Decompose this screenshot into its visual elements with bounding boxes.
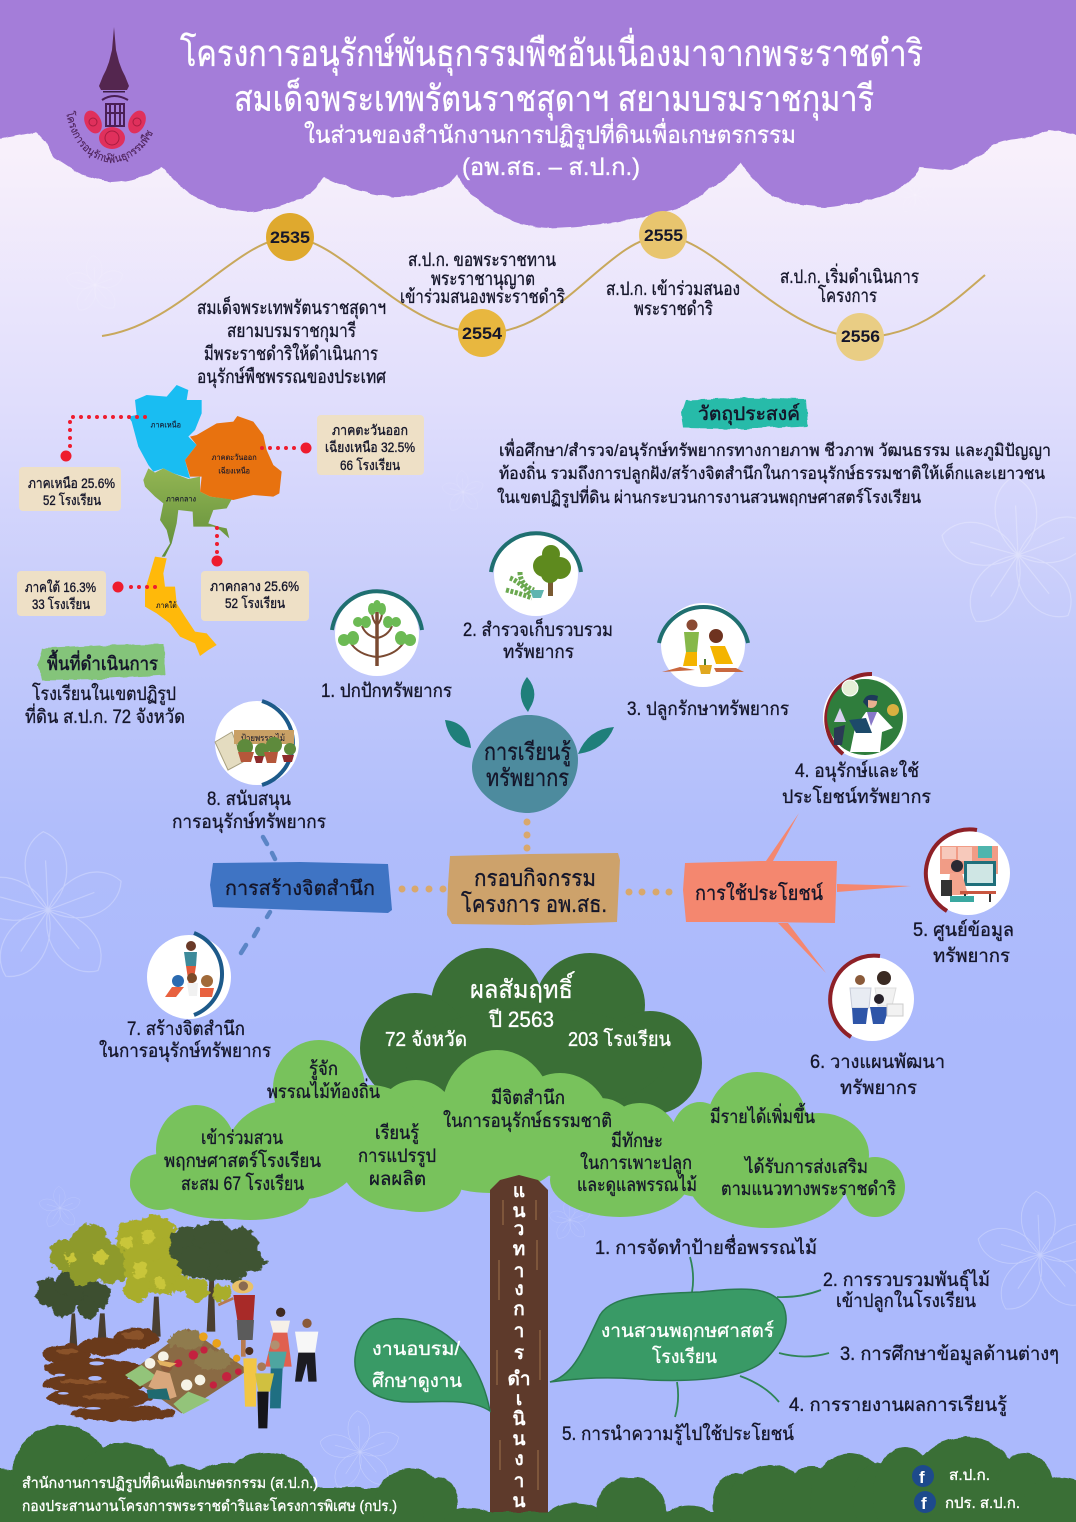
training leaf [355,1319,490,1411]
year 2535 [266,213,314,261]
icon: children planting [662,620,744,674]
activity 4: ประโยชน์ทรัพยากร [782,785,931,808]
activity 6 [810,956,945,1099]
training leaf: ศึกษาดูงาน [372,1371,462,1392]
year 2554 [458,309,506,357]
region names: ภาคตะวันออก [212,453,257,462]
activity 2 [463,532,613,663]
region names: เฉียงเหนือ [218,466,250,475]
timeline [102,211,985,389]
benefit text: ในการเพาะปลูก [580,1152,692,1174]
activity 7 [99,933,271,1063]
woman in yellow [243,1347,257,1407]
benefit text: เข้าร่วมสวน [201,1128,283,1149]
awareness box: การสร้างจิตสำนึก [225,878,375,900]
achievement tree canopy dark [360,948,702,1115]
benefit text: มีจิตสำนึก [491,1087,565,1109]
year 2555: 2555 [644,226,683,245]
botanical garden leaf [550,1257,829,1417]
vertical text: ร [514,1343,525,1364]
text 2535: สยามบรมราชกุมารี [227,320,356,343]
vertical text: ก [513,1299,525,1320]
man in red [218,1280,255,1357]
vertical text: า [514,1321,524,1342]
connector dots [398,818,672,896]
activity 6: 6. วางแผนพัฒนา [810,1052,945,1073]
achievement text: 203 โรงเรียน [568,1028,671,1051]
area text: ที่ดิน ส.ป.ก. 72 จังหวัด [25,703,185,728]
vertical text: ว [514,1219,524,1240]
north region [128,385,202,478]
people [218,1280,318,1428]
south callout: ภาคใต้ 16.3% [25,579,96,595]
social labels: ส.ป.ก. [949,1467,990,1484]
garden tasks: 5. การนำความรู้ไปใช้ประโยชน์ [562,1422,794,1445]
title: สมเด็จพระเทพรัตนราชสุดาฯ สยามบรมราชกุมารี [234,76,874,121]
title [180,27,923,181]
garden illustration [36,1216,318,1428]
man in khaki [255,1362,274,1428]
utilization box [683,813,911,973]
icon: facebook 1: f [919,1468,925,1487]
training leaf: งานอบรม/ [372,1339,461,1360]
objectives [497,398,1051,508]
footer text [22,1472,397,1515]
benefit text: และดูแลพรรณไม้ [577,1174,697,1196]
benefit text [164,1059,896,1200]
activity 8: 8. สนับสนุน [207,789,291,811]
year 2554: 2554 [462,324,503,343]
vertical text: น [512,1491,526,1512]
activity 3: 3. ปลูกรักษาทรัพยากร [627,699,789,720]
benefit text: สะสม 67 โรงเรียน [181,1172,304,1195]
activity 4 [782,674,931,808]
social labels: กปร. ส.ป.ก. [945,1495,1020,1512]
garden tasks [562,1234,1059,1445]
vertical text: า [514,1471,524,1492]
garden tasks: 1. การจัดทำป้ายชื่อพรรณไม้ [595,1234,817,1259]
logo: โครงการอนุรักษ์พันธุกรรมพืช [66,110,153,164]
framework box [447,853,620,925]
northeast callout: เฉียงเหนือ 32.5% [325,439,415,455]
achievement text [385,971,671,1051]
text 2556: โครงการ [818,284,877,307]
trees [36,1216,265,1347]
text 2556 [780,263,919,307]
timeline curve [102,235,985,337]
area heading: พื้นที่ดำเนินการ [47,650,158,675]
icon: facebook 1 [912,1465,934,1487]
spire [99,27,129,90]
text 2554: ส.ป.ก. ขอพระราชทาน [408,250,556,271]
region names [151,420,257,610]
vertical text: ง [514,1449,524,1470]
garden tasks: 2. การรวบรวมพันธุ์ไม้ [823,1269,990,1292]
map callout lines [70,417,296,587]
soil [43,1328,177,1421]
text 2535 [197,295,386,389]
text 2554: พระราชานุญาต [431,269,535,291]
trunk [490,1175,548,1516]
activity 2: 2. สำรวจเก็บรวบรวม [463,617,613,641]
monogram [102,96,128,126]
activity 7: 7. สร้างจิตสำนึก [127,1019,245,1040]
achievement text: 72 จังหวัด [385,1029,467,1051]
benefit text: ในการอนุรักษ์ธรรมชาติ [443,1110,612,1133]
learning blob: ทรัพยากร [486,765,569,792]
northeast callout: ภาคตะวันออก [332,422,408,438]
learning blob [445,677,614,813]
benefit text: ได้รับการส่งเสริม [743,1156,868,1178]
objectives text: ในเขตปฏิรูปที่ดิน ผ่านกระบวนการงานสวนพฤกษศาสตร์โรงเรียน [497,485,921,508]
vertical text: แ [513,1181,525,1202]
achievement text: ผลสัมฤทธิ์ [470,971,575,1004]
northeast region [185,416,282,500]
south region [145,557,217,656]
benefit text: ตามแนวทางพระราชดำริ [721,1179,896,1200]
benefit text: เรียนรู้ [375,1122,419,1144]
vertical text: นิ [512,1409,526,1430]
title: โครงการอนุรักษ์พันธุกรรมพืชอันเนื่องมาจากพระราชดำริ [180,27,923,76]
footer text: สำนักงานการปฏิรูปที่ดินเพื่อเกษตรกรรม (ส.ป.ก.) [22,1472,318,1492]
benefit text: พฤกษศาสตร์โรงเรียน [164,1149,321,1172]
achievement tree canopy light [130,1040,905,1228]
text 2535: สมเด็จพระเทพรัตนราชสุดาฯ [197,295,386,320]
roses [81,108,149,149]
benefit text: ผลผลิต [369,1169,426,1190]
icon: planning team [850,971,903,1024]
objectives heading [682,398,808,429]
north callout [19,467,121,511]
activity 1 [321,591,452,702]
year 2535: 2535 [270,228,310,247]
area text: โรงเรียนในเขตปฏิรูป [32,682,176,705]
vertical text: น [512,1201,526,1222]
icon: scientist [827,679,903,755]
activity 1: 1. ปกปักทรัพยากร [321,681,452,702]
branches [675,1257,829,1417]
benefit text: การแปรรูป [358,1146,436,1167]
framework box: โครงการ อพ.สธ. [461,891,607,917]
operating area [25,644,185,728]
awareness box [210,862,392,913]
footer text: กองประสานงานโครงการพระราชดำริและโครงการพิเศษ (กปร.) [22,1497,397,1515]
learning blob: การเรียนรู้ [484,739,571,767]
vertical text: ท [513,1239,525,1260]
year 2556 [836,313,884,361]
footer bush [0,1425,1076,1522]
text 2535: มีพระราชดำริให้ดำเนินการ [204,343,378,365]
year 2556: 2556 [841,327,880,346]
planting beds [125,1328,248,1414]
objectives text: เพื่อศึกษา/สำรวจ/อนุรักษ์ทรัพยากรทางกายภาพ ชีวภาพ วัฒนธรรม และภูมิปัญญา [499,438,1051,461]
icon: facebook 2: f [921,1494,927,1513]
farmer [147,1360,177,1400]
benefit text: มีรายได้เพิ่มขึ้น [710,1103,815,1128]
text 2556: ส.ป.ก. เริ่มดำเนินการ [780,263,919,288]
area text [25,682,185,728]
garden tasks: เข้าปลูกในโรงเรียน [836,1289,976,1312]
central region [143,468,232,557]
text 2555: พระราชดำริ [634,299,713,320]
man in teal [268,1340,287,1408]
vertical text: เ [516,1389,522,1410]
text 2555: ส.ป.ก. เข้าร่วมสนอง [606,279,740,300]
benefit text: มีทักษะ [611,1130,663,1152]
activity 2: ทรัพยากร [503,642,574,663]
botanical garden leaf: งานสวนพฤกษศาสตร์ [601,1320,774,1342]
icon: data center desk [940,846,998,902]
icon: tree [338,600,416,666]
northeast callout [317,415,424,475]
coral rays [766,813,911,973]
icon: tree and plants [506,545,571,598]
icon: teacher and children [165,941,214,997]
activity 3 [627,603,789,720]
objectives text [497,438,1051,508]
icon: facebook 2 [914,1491,936,1513]
activity 5: ทรัพยากร [933,946,1010,967]
south callout: 33 โรงเรียน [32,596,90,612]
achievement text: ปี 2563 [488,1007,554,1032]
south callout [17,571,106,616]
text 2554: เข้าร่วมสนองพระราชดำริ [400,287,565,308]
vertical text: ดำ [507,1369,531,1390]
central callout: 52 โรงเรียน [225,595,285,611]
woman in coral [265,1308,292,1367]
icon: plant pots and sign [215,730,296,770]
north callout: 52 โรงเรียน [43,492,101,508]
awareness dashes [241,837,275,953]
activity 5 [913,829,1014,967]
area heading [38,644,166,680]
benefit text: รู้จัก [309,1059,338,1080]
garden tasks: 3. การศึกษาข้อมูลด้านต่างๆ [840,1344,1059,1365]
activity 4: 4. อนุรักษ์และใช้ [795,760,919,783]
north callout: ภาคเหนือ 25.6% [28,475,115,491]
leaves [445,677,614,754]
utilization box: การใช้ประโยชน์ [695,882,823,905]
map of Thailand [128,385,282,656]
text 2555 [606,279,740,320]
icon: plant pots and sign: ป้ายพรรณไม้ [241,733,285,743]
objectives heading: วัตถุประสงค์ [698,403,800,426]
year 2555 [639,211,687,259]
map callout dots [60,442,312,592]
region names: ภาคเหนือ [151,420,181,429]
region names: ภาคใต้ [156,601,177,610]
garden tasks: 4. การรายงานผลการเรียนรู้ [789,1394,1007,1416]
social labels [945,1467,1020,1512]
title: ในส่วนของสำนักงานการปฏิรูปที่ดินเพื่อเกษตรกรรม [304,118,796,150]
activity 5: 5. ศูนย์ข้อมูล [913,919,1014,941]
framework box: กรอบกิจกรรม [474,865,596,891]
vertical text: ง [514,1279,524,1300]
activity 6: ทรัพยากร [840,1078,917,1099]
text 2554 [400,250,565,308]
activity 8 [172,701,326,834]
central callout: ภาคกลาง 25.6% [210,578,299,594]
central callout [201,571,309,621]
northeast callout: 66 โรงเรียน [340,457,400,473]
man in white [295,1319,318,1382]
activity 8: การอนุรักษ์ทรัพยากร [172,811,326,834]
vertical text: น [512,1429,526,1450]
vertical text: า [514,1261,524,1282]
botanical garden leaf: โรงเรียน [652,1345,717,1368]
benefit text: พรรณไม้ท้องถิ่น [267,1078,380,1103]
region names: ภาคกลาง [166,495,196,504]
header banner [0,0,1076,228]
title: (อพ.สธ. – ส.ป.ก.) [462,154,640,181]
text 2535: อนุรักษ์พืชพรรณของประเทศ [197,366,386,389]
logo [66,28,153,164]
activity 7: ในการอนุรักษ์ทรัพยากร [99,1040,271,1063]
